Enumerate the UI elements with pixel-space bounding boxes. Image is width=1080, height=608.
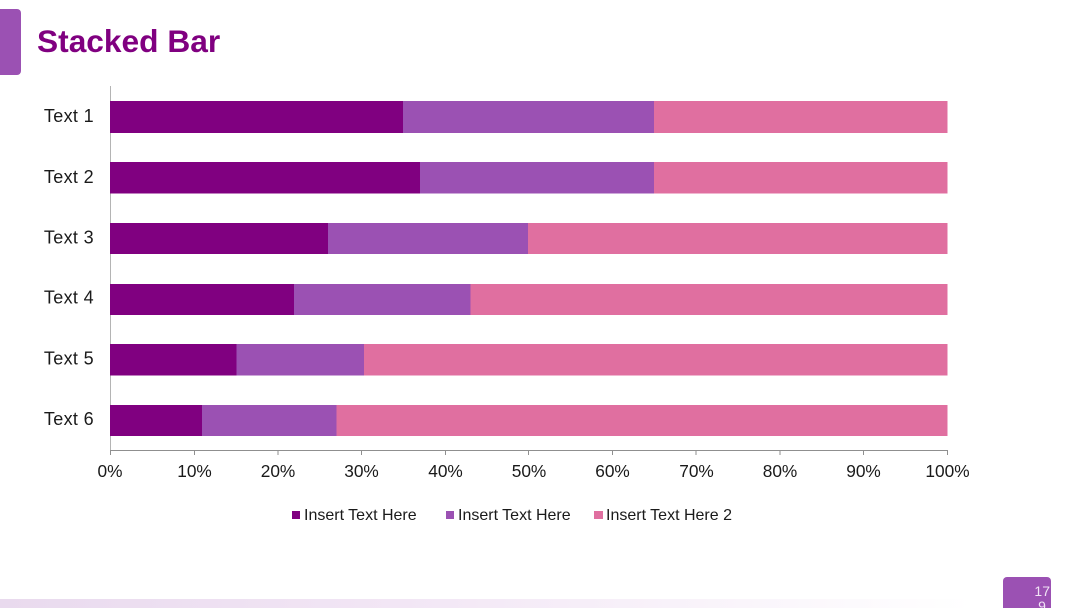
bar: Text 1: Text 1: [44, 106, 94, 126]
bar: Text 5: Text 5: [44, 348, 94, 368]
bar: Text 1: [44, 101, 948, 133]
legend: [292, 507, 732, 524]
percent axis: 60%: [595, 461, 630, 481]
bar: Text 6: Text 6: [44, 409, 94, 429]
bar: Text 6: [44, 405, 948, 436]
stacked bar chart: [44, 86, 970, 524]
legend: Insert Text Here 2: [606, 507, 732, 524]
percent axis: 80%: [763, 461, 797, 481]
percent axis: [98, 450, 970, 481]
bar: Text 3: [44, 223, 948, 254]
bar: Text 4: [44, 284, 948, 315]
legend: Insert Text Here: [458, 507, 571, 524]
footer gradient band: [0, 599, 1080, 608]
percent axis: 90%: [846, 461, 881, 481]
title: Stacked Bar: [37, 23, 220, 59]
percent axis: 0%: [98, 461, 122, 481]
page number badge: [1003, 577, 1051, 608]
percent axis: 100%: [925, 461, 970, 481]
bar: Text 2: [44, 162, 948, 194]
bar: Text 5: [44, 344, 948, 376]
percent axis: 30%: [344, 461, 379, 481]
percent axis: 40%: [428, 461, 463, 481]
bar: Text 2: Text 2: [44, 167, 94, 187]
bar: Text 4: Text 4: [44, 288, 94, 308]
percent axis: 10%: [177, 461, 212, 481]
percent axis: 20%: [261, 461, 295, 481]
bar: Text 3: Text 3: [44, 228, 94, 248]
category axis: [110, 86, 112, 450]
legend: Insert Text Here: [304, 507, 417, 524]
title accent tab: [0, 9, 21, 75]
percent axis: 70%: [679, 461, 714, 481]
page number badge: 17: [1034, 583, 1050, 599]
percent axis: 50%: [512, 461, 546, 481]
